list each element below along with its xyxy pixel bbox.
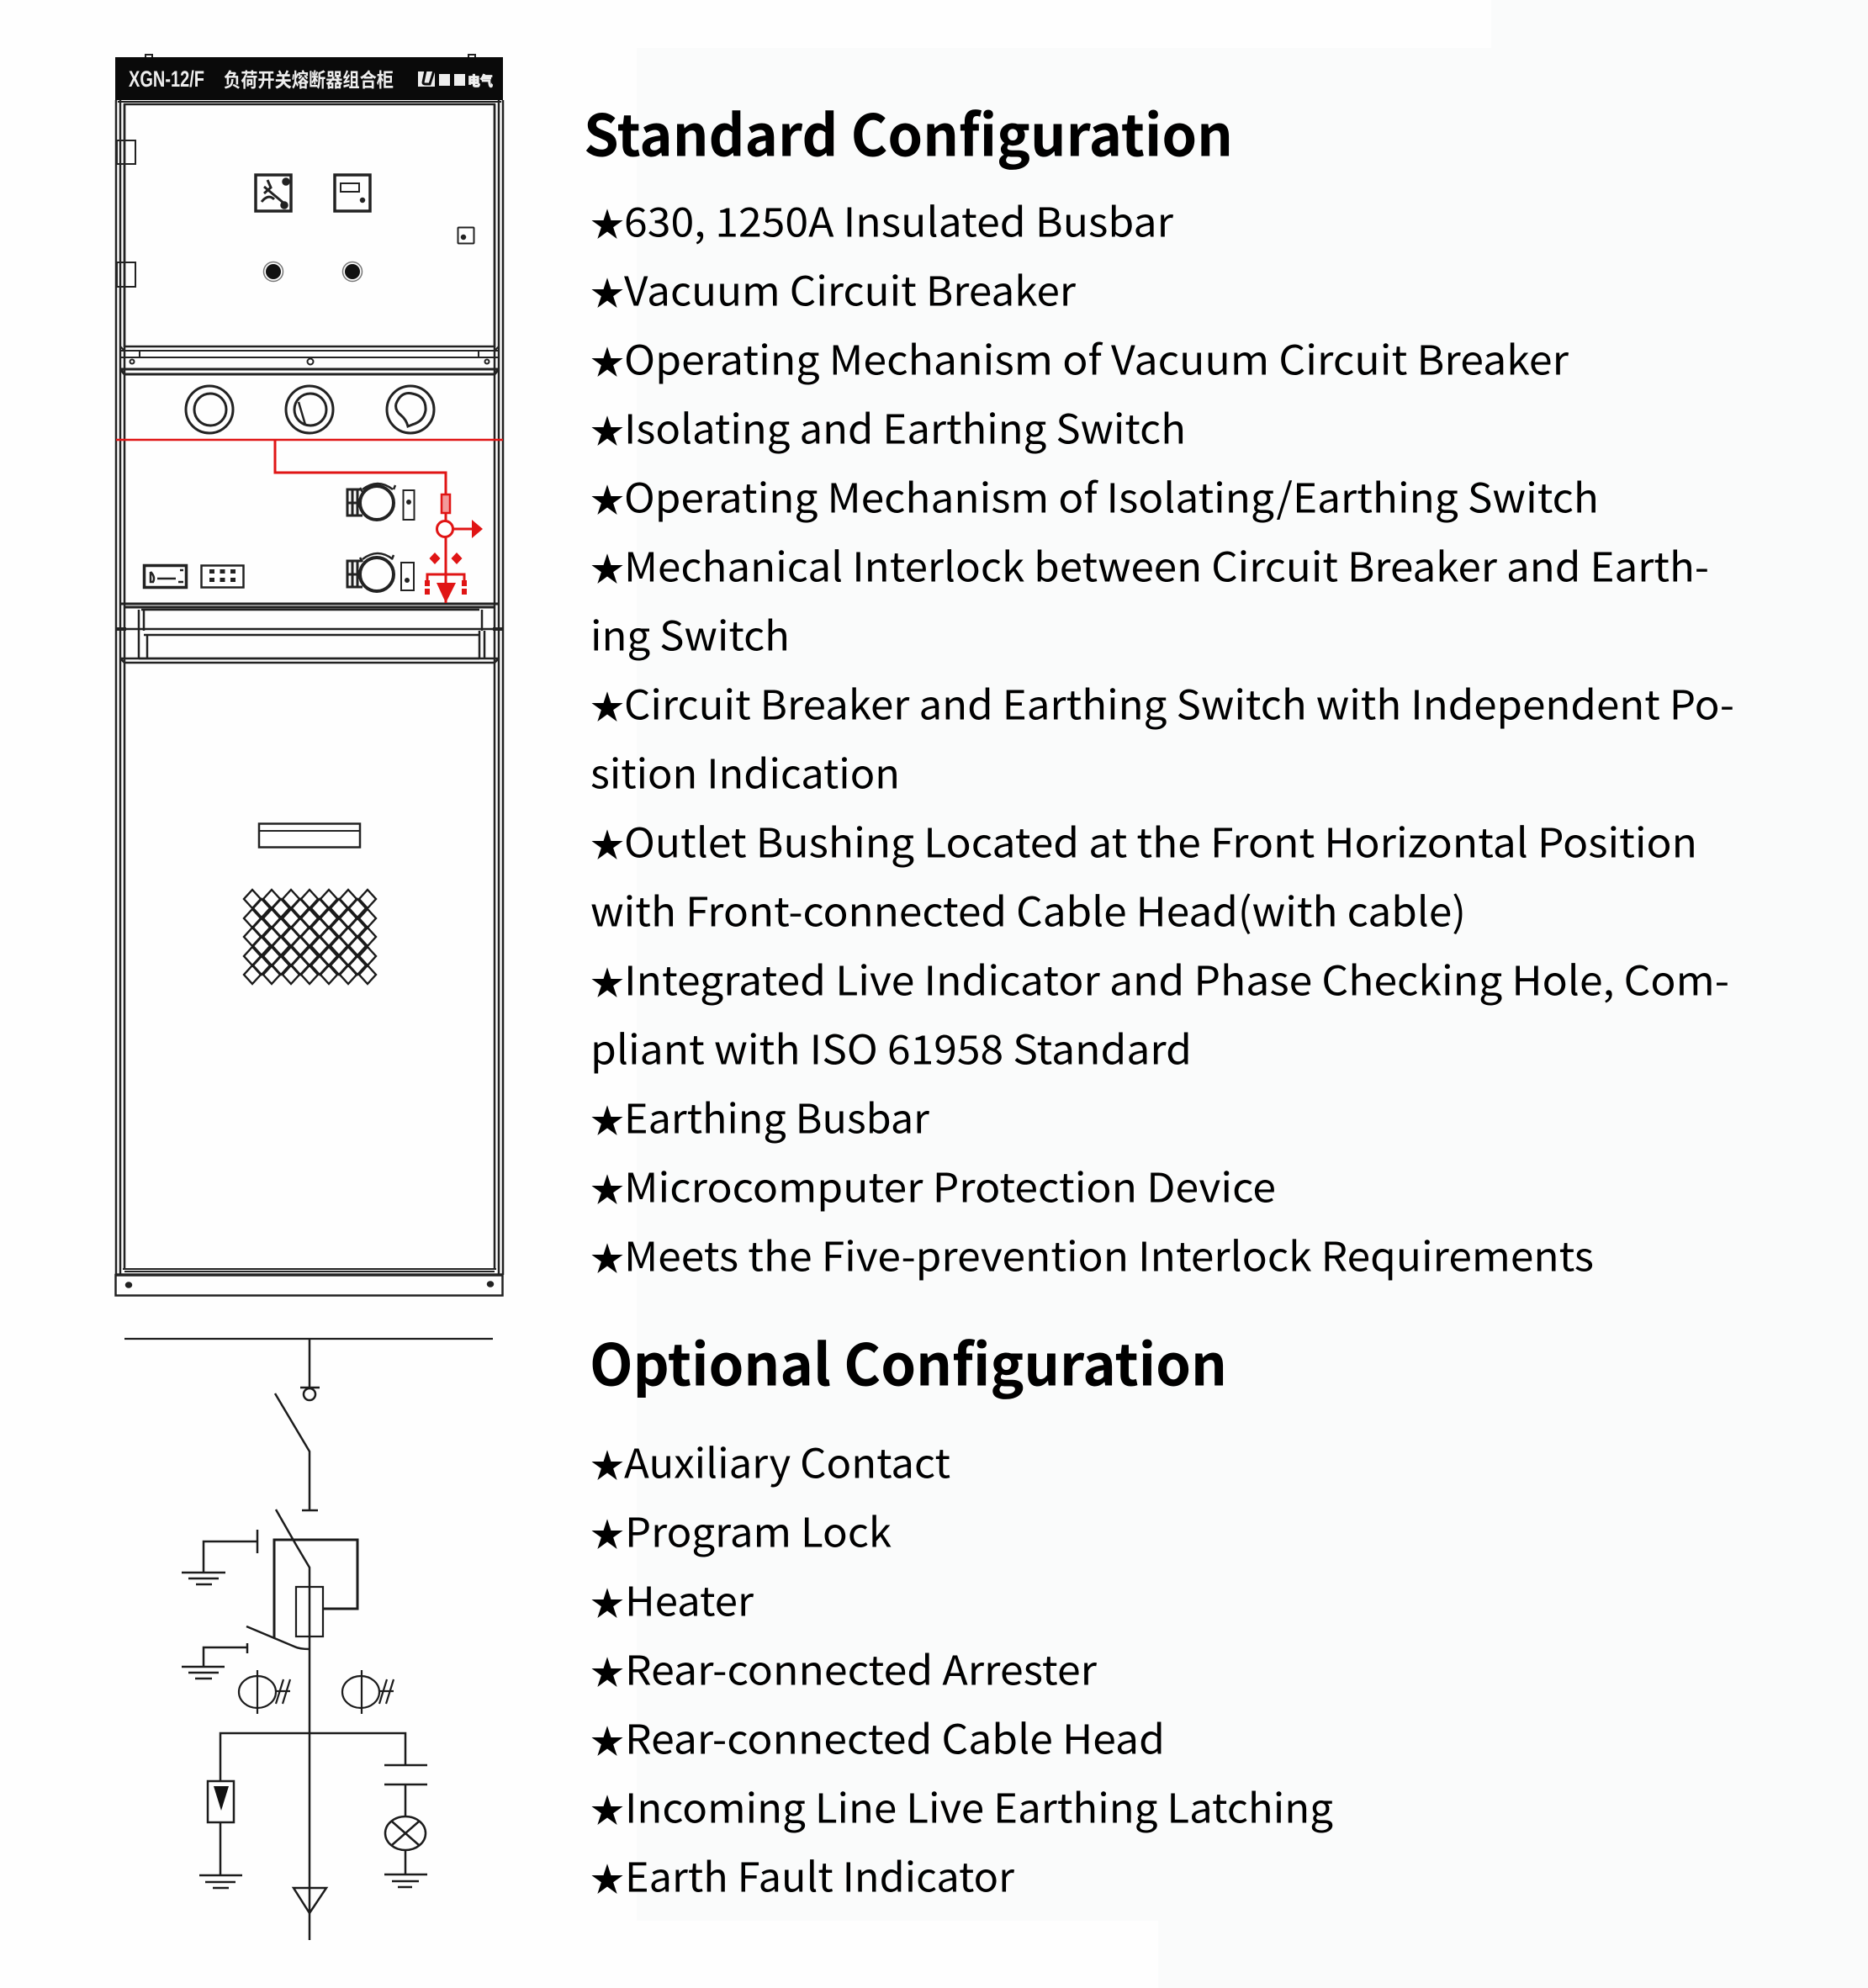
item: earthing busbar: Earthing Busbar <box>624 1087 929 1145</box>
item: vacuum circuit breaker: Vacuum Circuit Breaker <box>624 259 1076 318</box>
indicator light <box>264 262 283 281</box>
list: optional configuration items <box>590 1431 1333 1904</box>
cabinet front elevation drawing <box>115 55 503 1295</box>
current transformer right <box>342 1670 394 1714</box>
item: mechanical interlock: Mechanical Interlock between Circuit Breaker and Earth- <box>624 535 1709 594</box>
item: breaker mechanism: ★ <box>590 336 624 384</box>
red one-line circuit overlay <box>116 440 503 603</box>
item: position indication: ★ <box>590 680 624 729</box>
item: outlet bushing: ★ <box>590 818 624 867</box>
lower section rails <box>116 610 503 663</box>
item: live earthing latching: ★ <box>590 1784 624 1832</box>
key switch <box>458 227 474 244</box>
status indicator strip <box>202 565 244 587</box>
hinge <box>117 262 135 287</box>
item: heater: ★ <box>590 1577 624 1626</box>
item: protection device: ★ <box>590 1163 624 1212</box>
item: busbar: ★ <box>590 198 624 246</box>
brand logo <box>418 70 493 90</box>
item: busbar: 630, 1250A Insulated Busbar <box>624 190 1173 249</box>
capacitor divider with live indicator lamp <box>384 1765 427 1887</box>
earthing fork <box>427 574 464 584</box>
operating wheel: earthing switch <box>347 553 414 591</box>
operating wheel: isolating switch <box>347 484 414 520</box>
item: outlet bushing: with Front-connected Cable Head(with cable) <box>590 880 1466 938</box>
indicator light <box>343 262 362 281</box>
item: mechanical interlock: ing Switch <box>590 604 790 663</box>
item: breaker mechanism: Operating Mechanism of Vacuum Circuit Breaker <box>624 328 1569 387</box>
middle mechanism panel <box>120 369 499 607</box>
fuse symbol <box>442 494 450 513</box>
upper instrument door <box>117 104 499 365</box>
single-line electrical diagram <box>124 1339 493 1940</box>
outgoing arrow <box>453 520 483 538</box>
current transformer left <box>239 1670 290 1714</box>
item: five-prevention interlock: Meets the Five-prevention Interlock Requirements <box>624 1224 1594 1283</box>
protection relay <box>335 175 370 211</box>
item: mechanical interlock <box>590 535 1709 663</box>
cabinet nameplate header <box>115 55 503 100</box>
item: isolating switch: Isolating and Earthing Switch <box>624 397 1186 456</box>
handle slot <box>259 824 360 848</box>
model label: XGN-12/F <box>129 66 204 92</box>
earthing symbol lower <box>182 1643 247 1679</box>
item: outlet bushing: Outlet Bushing Located at the Front Horizontal Position <box>624 811 1697 870</box>
item: live indicator <box>590 949 1729 1076</box>
item: program lock: ★ <box>590 1508 624 1557</box>
item: auxiliary contact: Auxiliary Contact <box>624 1431 950 1490</box>
lower cable compartment door <box>123 824 496 1272</box>
item: heater: Heater <box>625 1569 754 1628</box>
ventilation mesh <box>244 890 376 984</box>
earthing symbol upper <box>182 1530 257 1584</box>
cable arrow head <box>437 583 456 603</box>
item: protection device: Microcomputer Protection Device <box>624 1155 1276 1214</box>
cable termination triangle <box>294 1888 326 1913</box>
item: cable head: ★ <box>590 1715 624 1763</box>
item: live indicator: pliant with ISO 61958 Standard <box>590 1018 1192 1076</box>
item: live earthing latching: Incoming Line Live Earthing Latching <box>625 1776 1333 1835</box>
item: position indication: Circuit Breaker and Earthing Switch with Independent Po- <box>624 673 1734 732</box>
brand logo: 电气 <box>468 70 493 90</box>
item: isolating mechanism: ★ <box>590 473 624 522</box>
item: live indicator: Integrated Live Indicator and Phase Checking Hole, Com- <box>624 949 1729 1007</box>
rotary knob <box>286 386 333 433</box>
busbar <box>124 1338 493 1340</box>
item: isolating switch: ★ <box>590 404 624 453</box>
item: five-prevention interlock: ★ <box>590 1232 624 1281</box>
item: program lock: Program Lock <box>625 1500 892 1559</box>
heading: Optional Configuration: Optional Configuration <box>590 1319 1227 1403</box>
list: standard configuration items <box>590 190 1734 1283</box>
rotary knob <box>387 386 434 433</box>
item: cable head: Rear-connected Cable Head <box>625 1707 1165 1766</box>
cabinet name label: 负荷开关熔断器组合柜 <box>224 64 394 93</box>
item: mechanical interlock: ★ <box>590 542 624 591</box>
item: earth fault indicator: Earth Fault Indicator <box>625 1845 1014 1904</box>
fuse-switch assembly <box>246 1510 357 1940</box>
item: outlet bushing <box>590 811 1697 938</box>
item: auxiliary contact: ★ <box>590 1439 624 1488</box>
item: earthing busbar: ★ <box>590 1094 624 1143</box>
item: live indicator: ★ <box>590 956 624 1005</box>
rotary knob <box>186 386 233 433</box>
cabinet outer frame <box>116 100 503 1275</box>
ammeter <box>256 175 291 211</box>
hinge <box>117 140 135 164</box>
base plate <box>115 1275 503 1295</box>
item: position indication: sition Indication <box>590 742 900 801</box>
heading: Standard Configuration: Standard Configuration <box>584 89 1233 173</box>
item: earth fault indicator: ★ <box>590 1853 624 1901</box>
disconnector <box>275 1339 320 1510</box>
interlock diamonds <box>429 553 463 564</box>
item: arrester: Rear-connected Arrester <box>625 1638 1097 1697</box>
item: position indication <box>590 673 1734 801</box>
branch conductor <box>220 1733 405 1781</box>
surge arrester with earth <box>199 1781 242 1888</box>
current transformer symbol <box>437 521 452 537</box>
item: isolating mechanism: Operating Mechanism of Isolating/Earthing Switch <box>624 466 1599 525</box>
item: arrester: ★ <box>590 1646 624 1695</box>
display panel <box>145 565 187 587</box>
item: vacuum circuit breaker: ★ <box>590 267 624 315</box>
